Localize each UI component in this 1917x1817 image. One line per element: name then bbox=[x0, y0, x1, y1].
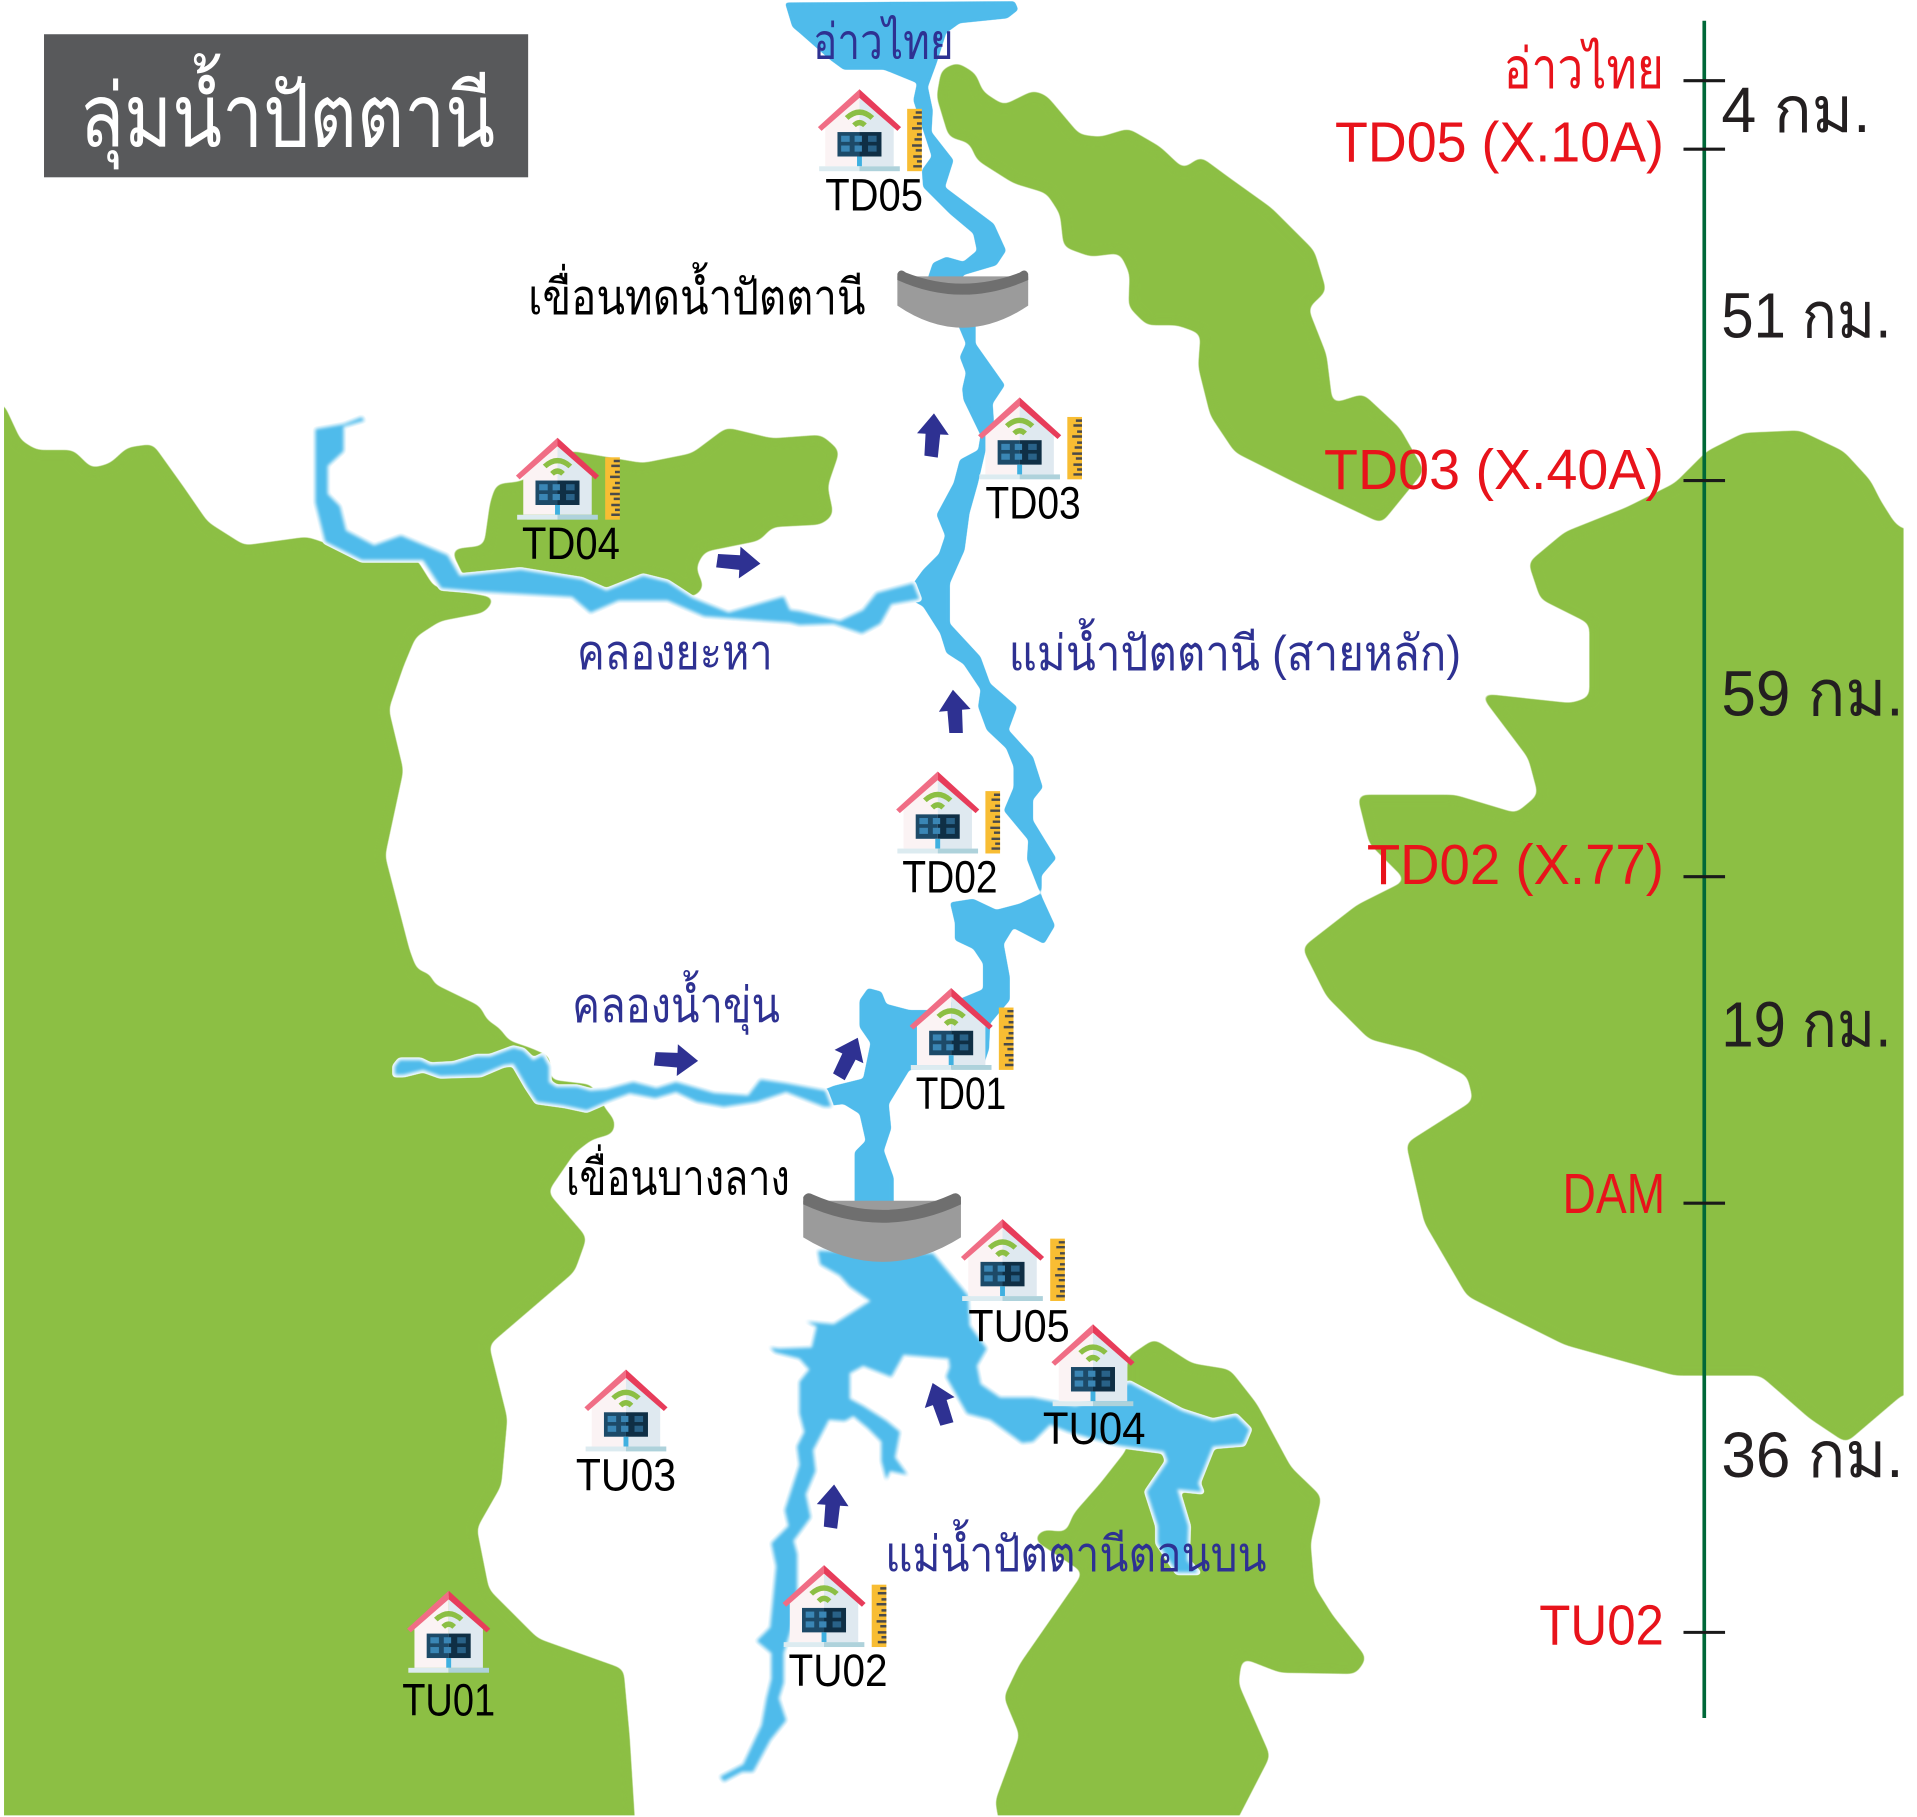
station TU01: TU01 bbox=[402, 1675, 495, 1726]
axis label: TD02: TD02 (X.77) bbox=[1367, 833, 1664, 896]
land: south-centre bbox=[995, 1339, 1367, 1817]
label: Khlong Nam Khun: คลองน้ำขุ่น bbox=[572, 970, 780, 1035]
river: gulf and lower Pattani bbox=[785, 1, 1018, 285]
axis label: DAM: DAM bbox=[1562, 1162, 1665, 1225]
axis label: TU02: TU02 bbox=[1539, 1594, 1664, 1657]
distance axis bbox=[1324, 21, 1904, 1718]
station TD01 bbox=[910, 988, 1014, 1119]
label: main Pattani river: แม่น้ำปัตตานี (สายหลัก) bbox=[1009, 618, 1461, 681]
station TU03 bbox=[576, 1369, 676, 1501]
label: Pattani diversion dam: เขื่อนทดน้ำปัตตานี bbox=[528, 262, 866, 325]
station TD05 bbox=[818, 89, 923, 220]
station TU04: TU04 bbox=[1043, 1403, 1146, 1454]
label: Khlong Yaha: คลองยะหา bbox=[577, 626, 773, 680]
distance: 19 km: 19 กม. bbox=[1721, 990, 1891, 1061]
station TD04 bbox=[516, 438, 620, 569]
station TD02: TD02 bbox=[902, 852, 998, 903]
river: main stem bbox=[822, 320, 1056, 1211]
title bbox=[44, 34, 528, 177]
distance: 51 km: 51 กม. bbox=[1721, 280, 1891, 351]
river: Khlong Nam Khun bbox=[395, 1048, 831, 1110]
label: Bang Lang dam: เขื่อนบางลาง bbox=[566, 1145, 790, 1206]
title: ลุ่มน้ำปัตตานี bbox=[79, 54, 495, 170]
distance: 59 km: 59 กม. bbox=[1721, 658, 1904, 729]
station TU05 bbox=[961, 1219, 1070, 1351]
label: Gulf of Thailand on map: อ่าวไทย bbox=[813, 15, 954, 70]
distance: 4 km: 4 กม. bbox=[1721, 75, 1871, 146]
axis label: TD05: TD05 (X.10A) bbox=[1335, 110, 1664, 173]
station TU02 bbox=[782, 1565, 888, 1696]
station TD02 bbox=[896, 772, 1000, 903]
land: TD04 peninsula bbox=[451, 427, 840, 599]
station TU04 bbox=[1043, 1324, 1146, 1454]
axis label: Gulf of Thailand: อ่าวไทย bbox=[1504, 37, 1664, 100]
distance: 36 km: 36 กม. bbox=[1721, 1420, 1904, 1491]
station TU05: TU05 bbox=[968, 1300, 1070, 1351]
flow arrows bbox=[654, 412, 973, 1529]
land: east bbox=[1302, 430, 1917, 1443]
land: north-east band bbox=[936, 62, 1424, 523]
station TD01: TD01 bbox=[916, 1068, 1006, 1119]
axis label: TD03: TD03 (X.40A) bbox=[1324, 438, 1664, 501]
station TU01 bbox=[402, 1591, 495, 1726]
station TU03: TU03 bbox=[576, 1450, 676, 1501]
river: Khlong Yaha bbox=[315, 417, 919, 633]
river: upper Pattani reservoir and Lake bbox=[720, 1251, 1249, 1782]
dam: Pattani diversion dam bbox=[897, 270, 1028, 328]
label: upper Pattani river: แม่น้ำปัตตานีตอนบน bbox=[885, 1519, 1267, 1582]
land: west bbox=[0, 404, 636, 1817]
station TD04: TD04 bbox=[522, 518, 620, 569]
station TD03 bbox=[978, 397, 1082, 528]
station TD03: TD03 bbox=[985, 477, 1081, 528]
station TD05: TD05 bbox=[825, 169, 923, 220]
dam: Bang Lang bbox=[803, 1193, 961, 1262]
station TU02: TU02 bbox=[789, 1645, 888, 1696]
